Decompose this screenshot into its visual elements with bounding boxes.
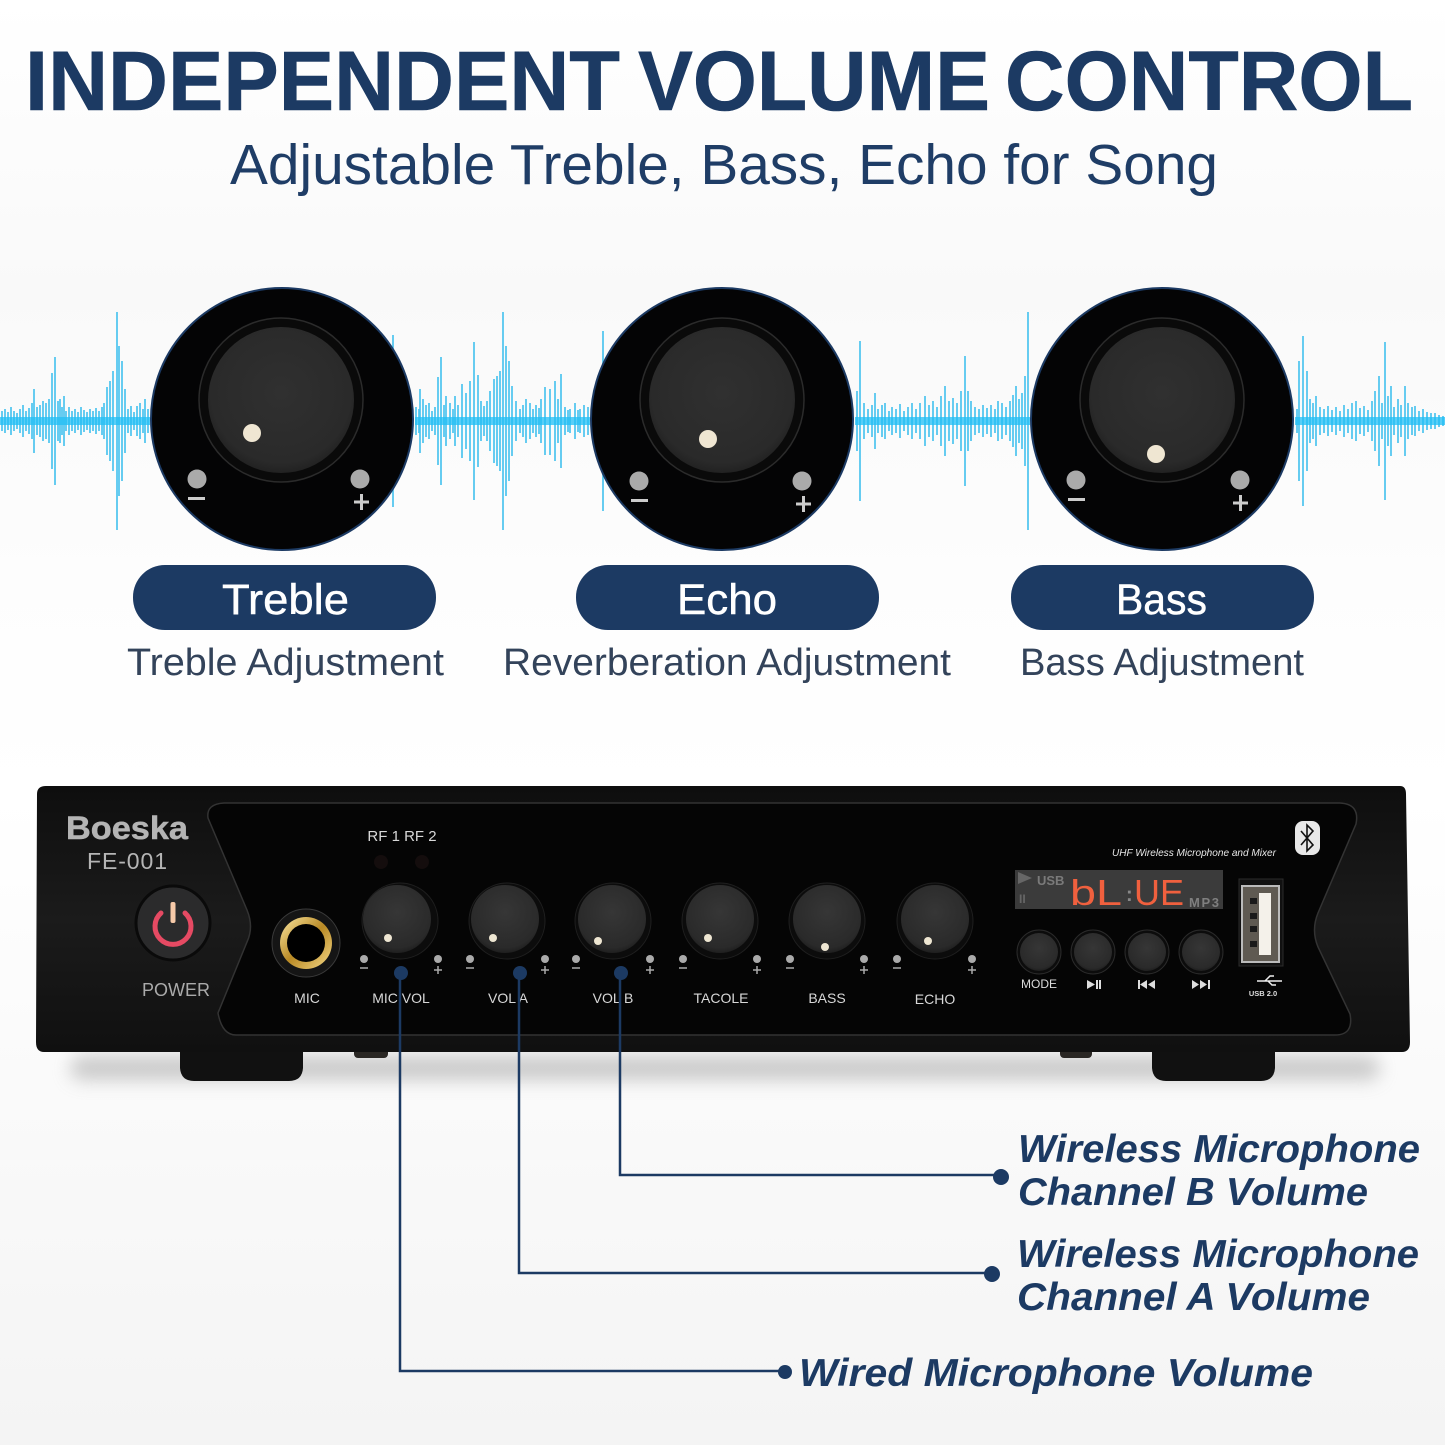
amplifier feet — [180, 1048, 1275, 1081]
panel labels: MIC VOL — [372, 990, 430, 1006]
connector: channel A volume — [513, 966, 1000, 1282]
title: CONTROL — [1005, 34, 1413, 128]
panel labels: ECHO — [915, 991, 955, 1007]
LED display: UE — [1134, 872, 1184, 913]
subtitle: Adjustable Treble, Bass, Echo for Song — [230, 133, 1218, 197]
callout: channel A — [1017, 1233, 1419, 1319]
connector: channel B volume — [614, 966, 1009, 1185]
media icons — [1087, 980, 1210, 989]
callout: channel A: Channel A Volume — [1017, 1276, 1370, 1319]
callout: channel B: Channel B Volume — [1018, 1171, 1368, 1214]
product tagline: UHF Wireless Microphone and Mixer — [1112, 847, 1276, 859]
LED display: USB — [1037, 873, 1064, 888]
LED display: MP3 — [1189, 895, 1219, 910]
panel labels: TACOLE — [694, 990, 748, 1006]
connector: wired microphone volume — [394, 966, 792, 1379]
label: bass: Bass Adjustment — [1020, 642, 1304, 684]
LED display: II — [1019, 892, 1026, 906]
panel labels: VOL B — [593, 990, 633, 1006]
label: treble — [127, 565, 444, 684]
USB port — [1239, 879, 1283, 966]
power button — [136, 886, 210, 960]
panel labels: BASS — [808, 990, 846, 1006]
label: treble: Treble Adjustment — [127, 642, 444, 684]
label: echo — [503, 565, 951, 684]
LED display — [1015, 870, 1223, 913]
mode label: MODE — [1021, 977, 1057, 991]
sound waveform — [0, 312, 1445, 530]
panel labels: VOL A — [488, 990, 529, 1006]
LED display: bL — [1070, 872, 1122, 913]
amplifier body — [36, 786, 1410, 1052]
label: treble: Treble — [222, 576, 349, 624]
knob: bass — [1031, 288, 1293, 550]
label: echo: Echo — [677, 576, 777, 624]
model: FE-001 — [87, 848, 167, 874]
knob min/max markers — [360, 955, 976, 974]
callout: channel B — [1018, 1128, 1420, 1214]
knob: echo — [591, 288, 853, 550]
label: echo: Reverberation Adjustment — [503, 642, 951, 684]
title — [25, 34, 1413, 128]
power label: POWER — [142, 980, 210, 1000]
label: bass: Bass — [1116, 576, 1207, 624]
USB icon — [1249, 976, 1282, 998]
knob: treble — [151, 288, 413, 550]
amplifier shadow — [70, 1056, 1380, 1080]
panel knobs — [362, 883, 973, 959]
label: bass — [1011, 565, 1314, 684]
title: VOLUME — [638, 34, 990, 128]
panel labels: MIC — [294, 990, 320, 1006]
brand: Boeska — [66, 810, 188, 846]
mic jack — [272, 909, 340, 977]
USB icon: USB 2.0 — [1249, 989, 1277, 998]
LED display: : — [1126, 884, 1133, 906]
bluetooth icon — [1295, 821, 1320, 855]
title: INDEPENDENT — [25, 34, 620, 128]
RF indicators — [374, 855, 429, 869]
panel labels: RF 1 RF 2 — [367, 828, 437, 845]
panel labels — [294, 828, 955, 1007]
callout: wired: Wired Microphone Volume — [799, 1352, 1313, 1395]
callout: channel A: Wireless Microphone — [1017, 1233, 1419, 1276]
callout: channel B: Wireless Microphone — [1018, 1128, 1420, 1171]
amplifier — [36, 786, 1410, 1052]
front panel — [208, 803, 1357, 1035]
media buttons — [1017, 930, 1223, 974]
